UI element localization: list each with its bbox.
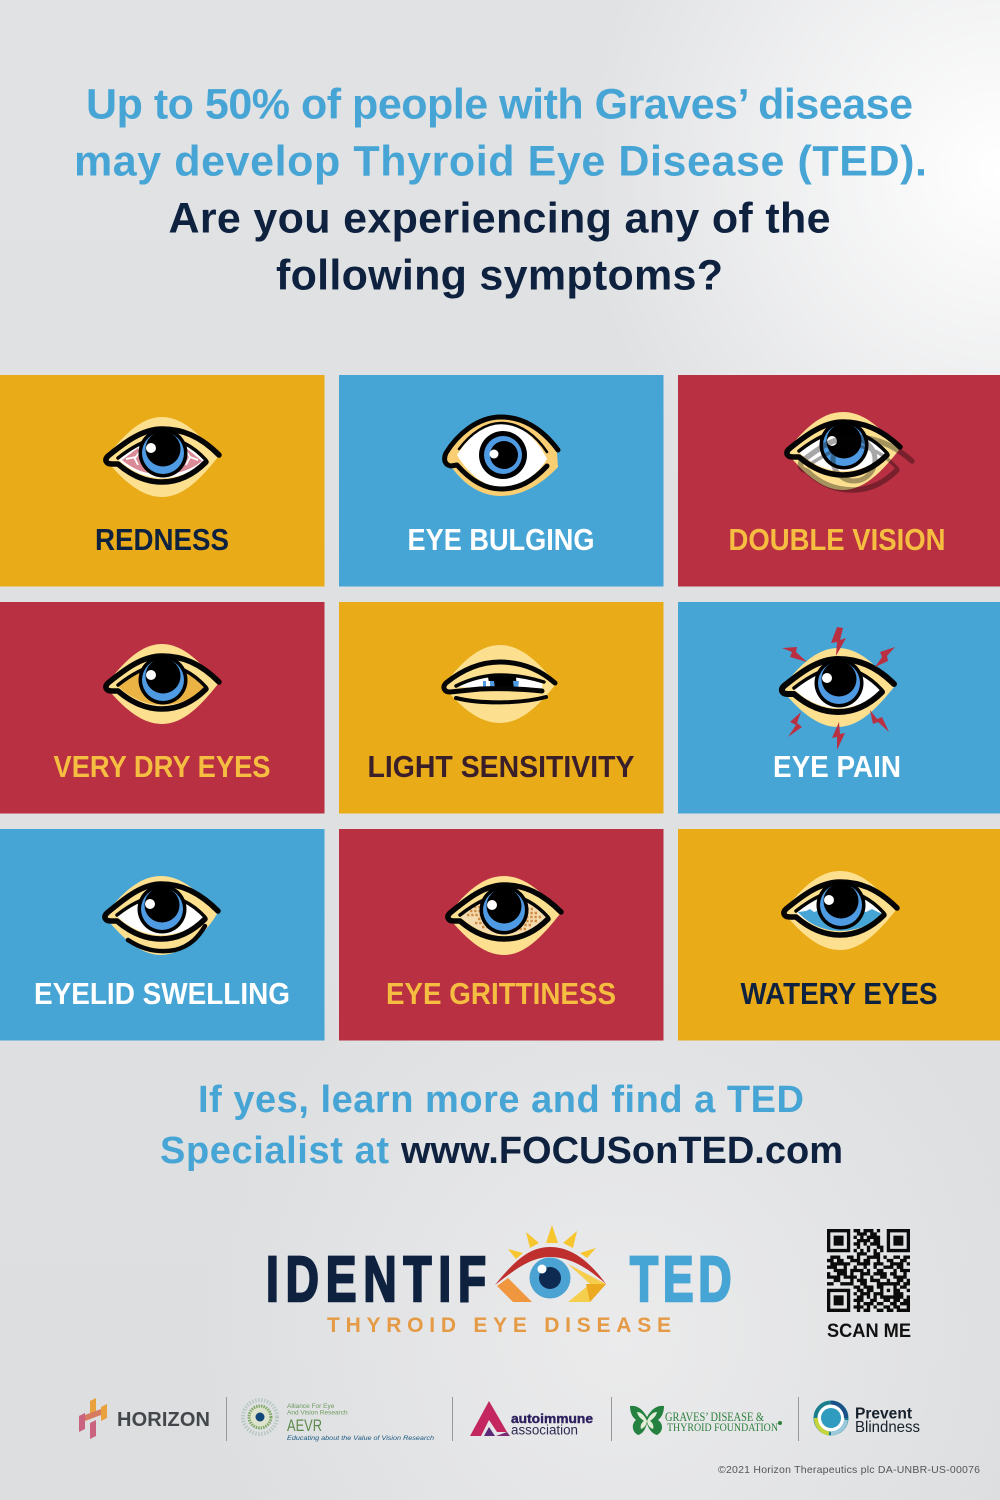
label: REDNESS: [95, 522, 229, 557]
panel: redness: [0, 375, 324, 586]
call to action: Specialist at: [160, 1130, 389, 1172]
label: EYELID SWELLING: [34, 976, 290, 1011]
call to action: [160, 1079, 843, 1172]
title: following symptoms?: [276, 252, 724, 300]
logo: Horizon: [79, 1398, 210, 1439]
panel: very dry eyes: [0, 602, 324, 814]
copyright: ©2021 Horizon Therapeutics plc DA-UNBR-US-00076: [718, 1464, 980, 1476]
divider: [611, 1397, 612, 1441]
logo: AEVR: AEVR: [287, 1416, 322, 1435]
logo eye: [495, 1225, 606, 1302]
panel: watery eyes: [678, 829, 1000, 1040]
label: LIGHT SENSITIVITY: [368, 749, 635, 784]
logo: Prevent Blindness: Blindness: [855, 1419, 920, 1436]
icon: squinting eye: [443, 645, 556, 723]
logo: AEVR: And Vision Research: [287, 1410, 348, 1416]
label: EYE BULGING: [408, 522, 594, 557]
title: Are you experiencing any of the: [168, 194, 832, 242]
label: EYE PAIN: [773, 749, 901, 784]
logo: autoimmune association: association: [511, 1422, 578, 1438]
logo: Graves' Disease and Thyroid Foundation: [630, 1406, 782, 1435]
icon: bulging eye: [444, 417, 558, 496]
panel: eye grittiness: [339, 829, 664, 1040]
icon: watery eye: [783, 871, 897, 950]
title: Up to 50% of people with Graves’ disease: [86, 80, 914, 128]
label: DOUBLE VISION: [728, 522, 946, 557]
call to action: www.FOCUSonTED.com: [400, 1130, 843, 1172]
logo: autoimmune association: [470, 1401, 593, 1438]
panel: double vision: [678, 375, 1000, 586]
icon: swollen eye: [104, 876, 218, 955]
logo: Identify TED: TED: [630, 1244, 736, 1315]
logo: Horizon: HORIZON: [117, 1409, 210, 1431]
label: VERY DRY EYES: [54, 749, 270, 784]
icon: red eye: [105, 417, 219, 497]
divider: [798, 1397, 799, 1441]
logo: autoimmune association: autoimmune: [511, 1411, 593, 1426]
logo: Prevent Blindness: Prevent: [855, 1406, 912, 1422]
icon: gritty eye: [447, 876, 561, 955]
QR code: [827, 1231, 910, 1310]
icon: double vision eye: [786, 412, 912, 490]
title: [74, 80, 928, 300]
logo: Prevent Blindness: [816, 1402, 920, 1436]
divider: [226, 1397, 227, 1441]
logo: Graves' Disease and Thyroid Foundation: GRAVES’ DISEASE &: [665, 1409, 764, 1424]
logo: Graves' Disease and Thyroid Foundation: THYROID FOUNDATION: [667, 1422, 779, 1434]
icon: dry eye: [105, 644, 219, 724]
logo: Identify TED: THYROID EYE DISEASE: [327, 1314, 671, 1337]
divider: [452, 1397, 453, 1441]
call to action: If yes, learn more and find a TED: [198, 1079, 804, 1121]
logo: AEVR: Educating about the Value of Vision Research: [287, 1435, 434, 1442]
panel: eye bulging: [339, 375, 664, 586]
label: EYE GRITTINESS: [386, 976, 616, 1011]
logo: Identify TED: [266, 1225, 736, 1337]
panel: light sensitivity: [339, 602, 664, 814]
label: WATERY EYES: [740, 976, 938, 1011]
logo: AEVR: Alliance For Eye: [287, 1403, 335, 1410]
logo: AEVR: [243, 1400, 434, 1442]
panel: eye pain: [678, 602, 1000, 814]
icon: painful eye: [781, 627, 895, 750]
logo: Identify TED: IDENTIF: [266, 1244, 493, 1315]
scan me label: SCAN ME: [827, 1321, 911, 1342]
panel: eyelid swelling: [0, 829, 324, 1040]
title: may develop Thyroid Eye Disease (TED).: [74, 138, 928, 186]
